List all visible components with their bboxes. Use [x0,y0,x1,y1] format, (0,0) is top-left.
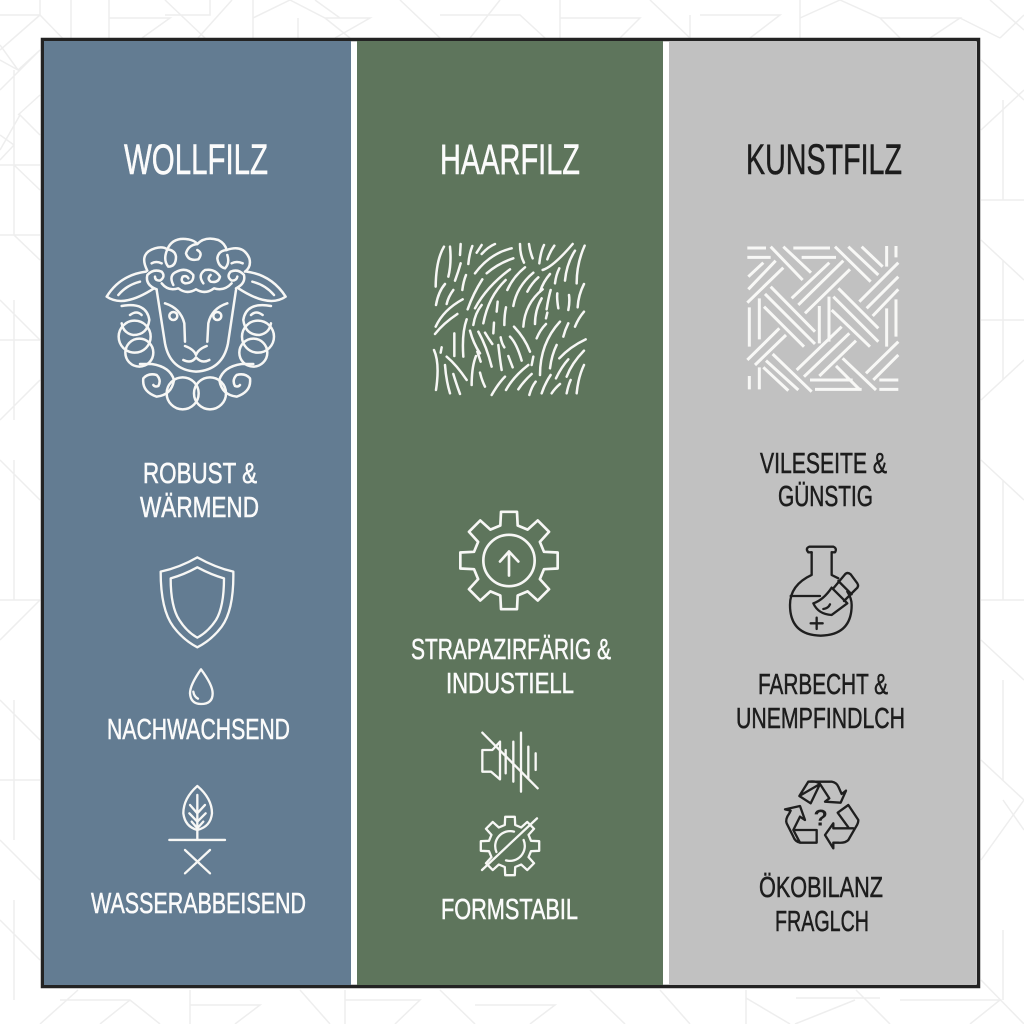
heading: Kunstfilz: KUNSTFILZ [746,136,902,184]
label: Farbecht & unempfindlch [736,669,905,735]
icon: gear with arrow [460,512,558,609]
label: Vileseite & günstig [760,448,887,513]
label: Robust & wärmend: ROBUST & [143,458,257,490]
label: Ökobilanz fraglch: ÖKOBILANZ [759,872,883,904]
label: Formstabil: FORMSTABIL [441,894,578,926]
icon: shield [161,557,233,647]
icon: woven synthetic texture [747,246,898,392]
label: Ökobilanz fraglch [759,872,883,938]
panel: Kunstfilz [669,41,976,985]
panel: Haarfilz [357,41,663,985]
label: Farbecht & unempfindlch: FARBECHT & [758,669,888,701]
label: Strapazirfärig & industiell [411,634,611,700]
icon: water drop [190,669,213,704]
label: Farbecht & unempfindlch: UNEMPFINDLCH [736,703,905,735]
icon: hair fibre texture [434,244,586,395]
label: Vileseite & günstig: GÜNSTIG [778,481,873,513]
label: Strapazirfärig & industiell: INDUSTIELL [446,668,574,700]
label: Nachwachsend: NACHWACHSEND [107,714,290,746]
icon: crossed gear [481,817,539,875]
icon: sheep [107,239,286,409]
panel: Wollfilz [44,41,351,985]
label: Robust & wärmend: WÄRMEND [140,492,259,524]
heading: Haarfilz: HAARFILZ [440,136,580,184]
icon: flask with brush [790,547,858,636]
label: Robust & wärmend [140,458,259,524]
label: Wasserabbeisend: WASSERABBEISEND [91,888,306,920]
icon: muted sound [482,733,538,792]
label: Strapazirfärig & industiell: STRAPAZIRFÄRIG & [411,634,611,666]
icon: recycling with question mark [785,781,858,848]
heading: Wollfilz: WOLLFILZ [124,136,268,184]
label: Vileseite & günstig: VILESEITE & [760,448,887,480]
label: Ökobilanz fraglch: FRAGLCH [775,906,869,938]
icon: recycling with question mark: ? [814,804,828,830]
icon: leaf with cross [169,786,225,873]
